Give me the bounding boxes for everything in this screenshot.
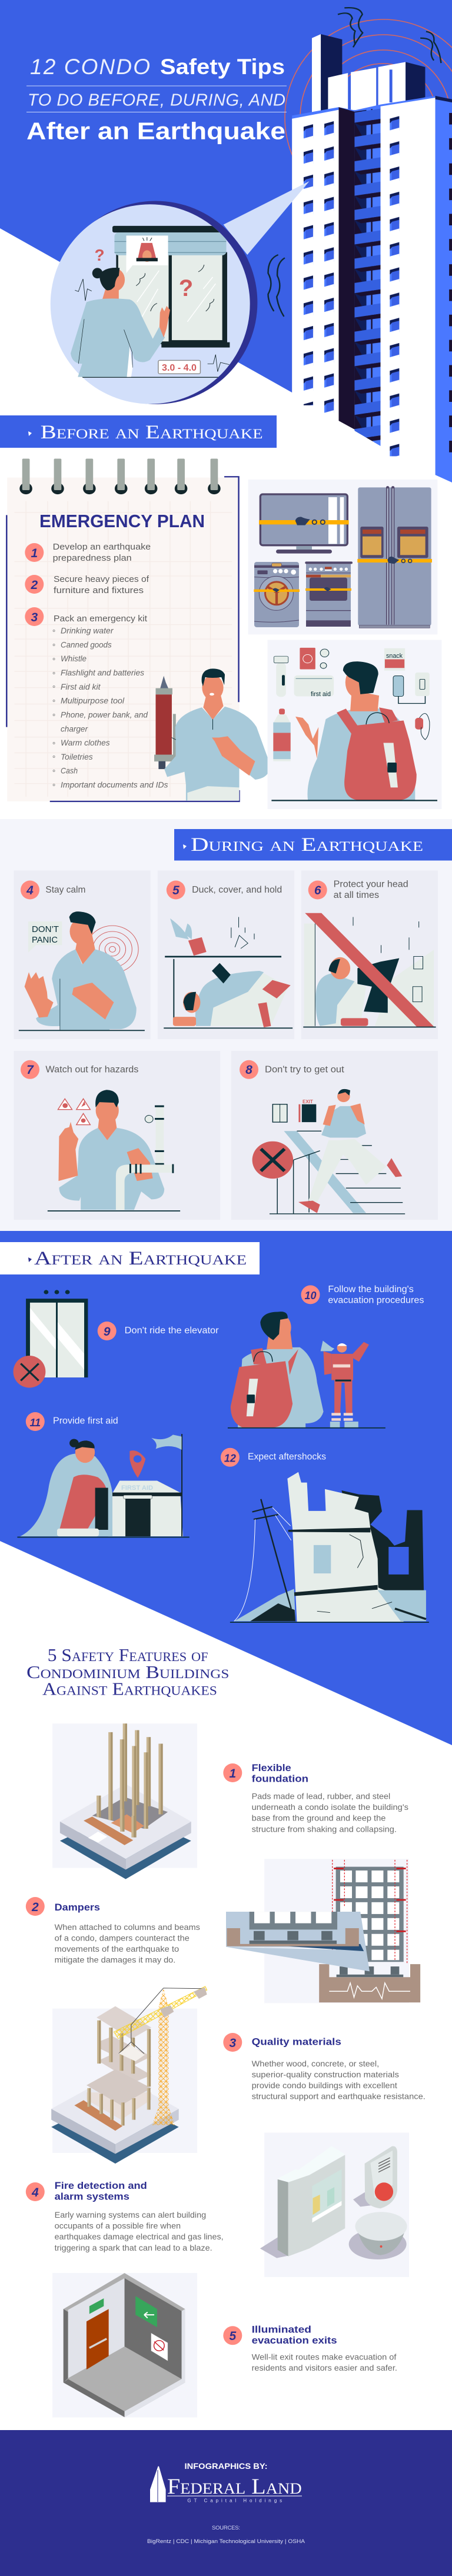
tip 12 aftershocks: 12: [224, 1452, 236, 1464]
feature 4: earthquakes damage electrical and gas lines,: [55, 2232, 224, 2241]
step 1: preparedness plan: [53, 554, 132, 563]
title: [26, 55, 287, 145]
logo: Federal Land: [150, 2467, 302, 2503]
shake marks: [268, 8, 441, 317]
man with backpack: [271, 661, 437, 801]
feature 5: residents and visitors easier and safer.: [252, 2363, 397, 2372]
feature 2: mitigate the damages it may do.: [55, 1955, 175, 1965]
feature 2: 2: [31, 1901, 39, 1914]
feature 1: Pads made of lead, rubber, and steel: [252, 1791, 390, 1800]
panel: tip 5 duck cover hold: Duck, cover, and hold: [192, 885, 282, 895]
section banner: before: Before an Earthquake: [41, 422, 263, 443]
feature 4: [26, 2180, 224, 2252]
emergency kit list: Important documents and IDs: [61, 780, 168, 790]
title: After an Earthquake: [26, 118, 285, 145]
feature 3: structural support and earthquake resistance.: [252, 2092, 426, 2101]
during background: [0, 819, 452, 1231]
panel: emergency kit items: [268, 640, 441, 809]
feature 2: movements of the earthquake to: [55, 1944, 179, 1953]
emergency kit list: charger: [61, 724, 88, 733]
step 2: [25, 575, 149, 595]
section banner: before: [0, 415, 277, 448]
panel: secured appliances: [248, 480, 437, 634]
title: TO DO BEFORE, DURING, AND: [28, 91, 285, 109]
feature 5: Illuminated: [252, 2324, 311, 2335]
emergency kit list: Drinking water: [61, 626, 114, 635]
credit line: INFOGRAPHICS BY:: [185, 2461, 267, 2471]
icon: water bottle: [273, 708, 291, 761]
heading: 5 safety features: 5 Safety Features of: [48, 1645, 208, 1665]
tip 11 first aid: [17, 1412, 190, 1537]
panel: tip 5 duck cover hold: 5: [172, 884, 180, 897]
section banner: during: [174, 829, 452, 860]
tip 10 evacuation: [228, 1284, 424, 1429]
feature 3: superior-quality construction materials: [252, 2070, 399, 2079]
kit labels: [311, 653, 403, 698]
feature 5: 5: [229, 2329, 236, 2343]
feature 4: occupants of a possible fire when: [55, 2221, 181, 2231]
feature 3: provide condo buildings with excellent: [252, 2081, 397, 2090]
feature 4: alarm systems: [55, 2191, 129, 2202]
feature 1: base from the ground and keep the: [252, 1813, 386, 1823]
feature 2: [26, 1897, 200, 1965]
emergency kit list: Toiletries: [61, 752, 93, 761]
panel: tip 8 don't get out: 8: [245, 1063, 252, 1077]
panel: tip 7 hazards: 7: [26, 1063, 34, 1077]
panel: tip 6 protect head: 6: [314, 884, 321, 897]
panel: tip 8 don't get out: Don't try to get out: [265, 1065, 344, 1075]
feature 3: 3: [229, 2036, 236, 2050]
step 2: Secure heavy pieces of: [54, 575, 149, 584]
icon: television: [259, 494, 349, 554]
feature 1: underneath a condo isolate the building's: [252, 1802, 408, 1812]
section banner: after: After an Earthquake: [34, 1248, 247, 1269]
callout: woman at window: ?: [94, 246, 105, 264]
panel: evacuation exit illustration: [52, 2273, 197, 2417]
panel: alarm systems illustration: [260, 2133, 409, 2277]
feature 1: Flexible: [252, 1762, 291, 1773]
step 1: Develop an earthquake: [53, 543, 151, 552]
callout: woman at window: ?: [179, 275, 193, 301]
condo tower illustration: [292, 34, 452, 482]
tip 9 elevator: Don't ride the elevator: [125, 1326, 219, 1336]
callout: woman at window: [51, 181, 310, 404]
icon: fridge: [357, 486, 432, 628]
step 3: Pack an emergency kit: [54, 614, 147, 624]
tip 12 aftershocks: Expect aftershocks: [248, 1452, 326, 1462]
feature 1: [223, 1762, 408, 1833]
title: Safety Tips: [160, 55, 285, 79]
after background: [0, 1231, 452, 1745]
heading: emergency plan: EMERGENCY PLAN: [39, 511, 205, 531]
heading: 5 safety features: [26, 1645, 229, 1699]
feature 2: When attached to columns and beams: [55, 1922, 200, 1932]
tip 10 evacuation: evacuation procedures: [328, 1296, 424, 1306]
tip 10 evacuation: Follow the building's: [328, 1284, 414, 1294]
emergency kit list: Phone, power bank, and: [61, 710, 148, 719]
kit labels: snack: [386, 653, 403, 660]
callout: woman at window: 3.0 - 4.0: [162, 363, 197, 373]
tip 9 elevator: 9: [104, 1325, 111, 1339]
kit labels: first aid: [311, 691, 331, 698]
tip 11 first aid: FIRST AID: [121, 1485, 153, 1492]
feature 4: Early warning systems can alert building: [55, 2210, 206, 2219]
panel: foundation illustration: [52, 1723, 197, 1879]
logo: Federal Land: GT Capital Holdings: [187, 2498, 282, 2503]
step 3: 3: [31, 611, 38, 624]
panel: tip 8 don't get out: [231, 1051, 438, 1220]
panel: tip 4 stay calm: Stay calm: [45, 885, 85, 895]
tip 10 evacuation: 10: [304, 1290, 317, 1302]
panel: tip 4 stay calm: 4: [26, 884, 34, 897]
feature 3: Quality materials: [252, 2036, 341, 2047]
title: 12 CONDO: [30, 55, 150, 79]
emergency kit list: [53, 626, 168, 790]
panel: quality materials illustration: [51, 1986, 207, 2164]
icon: passport: [300, 648, 315, 669]
panel: tip 6 protect head: at all times: [334, 890, 379, 900]
section banner: after: [0, 1242, 260, 1274]
panel: tip 7 hazards: Watch out for hazards: [45, 1065, 139, 1075]
tip 11 first aid: Provide first aid: [53, 1416, 118, 1426]
tip 11 first aid: 11: [29, 1417, 41, 1429]
panel: emergency plan notebook: [6, 458, 240, 801]
sources label: SOURCES:: [212, 2525, 240, 2531]
step 3: [25, 607, 147, 626]
emergency kit list: Multipurpose tool: [61, 695, 125, 705]
tip 9 elevator: [14, 1290, 219, 1387]
panel: tip 4 stay calm: PANIC: [32, 935, 58, 945]
icon: oven: [305, 561, 353, 627]
emergency kit list: Flashlight and batteries: [61, 668, 144, 677]
icon: snack: [384, 648, 405, 671]
crane: [114, 1986, 207, 2125]
step 2: furniture and fixtures: [54, 586, 144, 595]
feature 5: [223, 2324, 397, 2372]
feature 3: [223, 2033, 426, 2101]
feature 4: 4: [31, 2186, 39, 2199]
step 1: 1: [31, 547, 38, 560]
emergency kit list: Canned goods: [61, 640, 112, 650]
feature 1: 1: [229, 1767, 236, 1780]
panel: tip 4 stay calm: [14, 870, 151, 1039]
panel: tip 7 hazards: [14, 1051, 220, 1220]
emergency kit list: Whistle: [61, 654, 87, 663]
emergency kit list: Warm clothes: [61, 738, 110, 747]
feature 2: of a condo, dampers counteract the: [55, 1933, 190, 1943]
sources list: BigRentz | CDC | Michigan Technological University | OSHA: [147, 2538, 305, 2545]
feature 3: Whether wood, concrete, or steel,: [252, 2059, 379, 2068]
panel: tip 6 protect head: Protect your head: [334, 880, 408, 890]
feature 5: Well-lit exit routes make evacuation of: [252, 2352, 397, 2362]
icon: whistle: [415, 714, 430, 740]
tip 12 aftershocks: [221, 1448, 429, 1623]
heading: 5 safety features: Condominium Buildings: [26, 1662, 229, 1682]
illustration: man holding flashlight: [154, 668, 270, 801]
panel: dampers illustration: [226, 1859, 420, 2003]
heading: 5 safety features: Against Earthquakes: [42, 1679, 217, 1699]
feature 5: evacuation exits: [252, 2335, 337, 2346]
icon: coins: [320, 649, 329, 668]
emergency kit list: Cash: [61, 766, 78, 776]
icon: washing machine: [254, 562, 300, 627]
panel: tip 5 duck cover hold: [158, 870, 294, 1039]
emergency kit list: First aid kit: [61, 682, 101, 691]
icon: first aid pouch: [294, 675, 334, 696]
panel: tip 6 protect head: [301, 870, 438, 1039]
icon: phone and power bank: [393, 673, 430, 704]
section banner: during: During an Earthquake: [191, 834, 423, 856]
step 1: [25, 543, 151, 563]
icon: flashlight: [274, 656, 288, 697]
footer: [0, 2430, 452, 2576]
hero background: [0, 0, 452, 412]
feature 1: structure from shaking and collapsing.: [252, 1824, 397, 1833]
step 2: 2: [30, 578, 38, 592]
feature 4: Fire detection and: [55, 2180, 147, 2191]
panel: tip 8 don't get out: EXIT: [303, 1099, 313, 1104]
panel: tip 4 stay calm: DON’T: [32, 924, 59, 934]
feature 2: Dampers: [55, 1902, 100, 1913]
logo: Federal Land: Federal Land: [167, 2475, 302, 2499]
shockwave arcs: [285, 19, 452, 216]
feature 1: foundation: [252, 1773, 308, 1785]
feature 4: triggering a spark that can lead to a blaze.: [55, 2243, 212, 2252]
